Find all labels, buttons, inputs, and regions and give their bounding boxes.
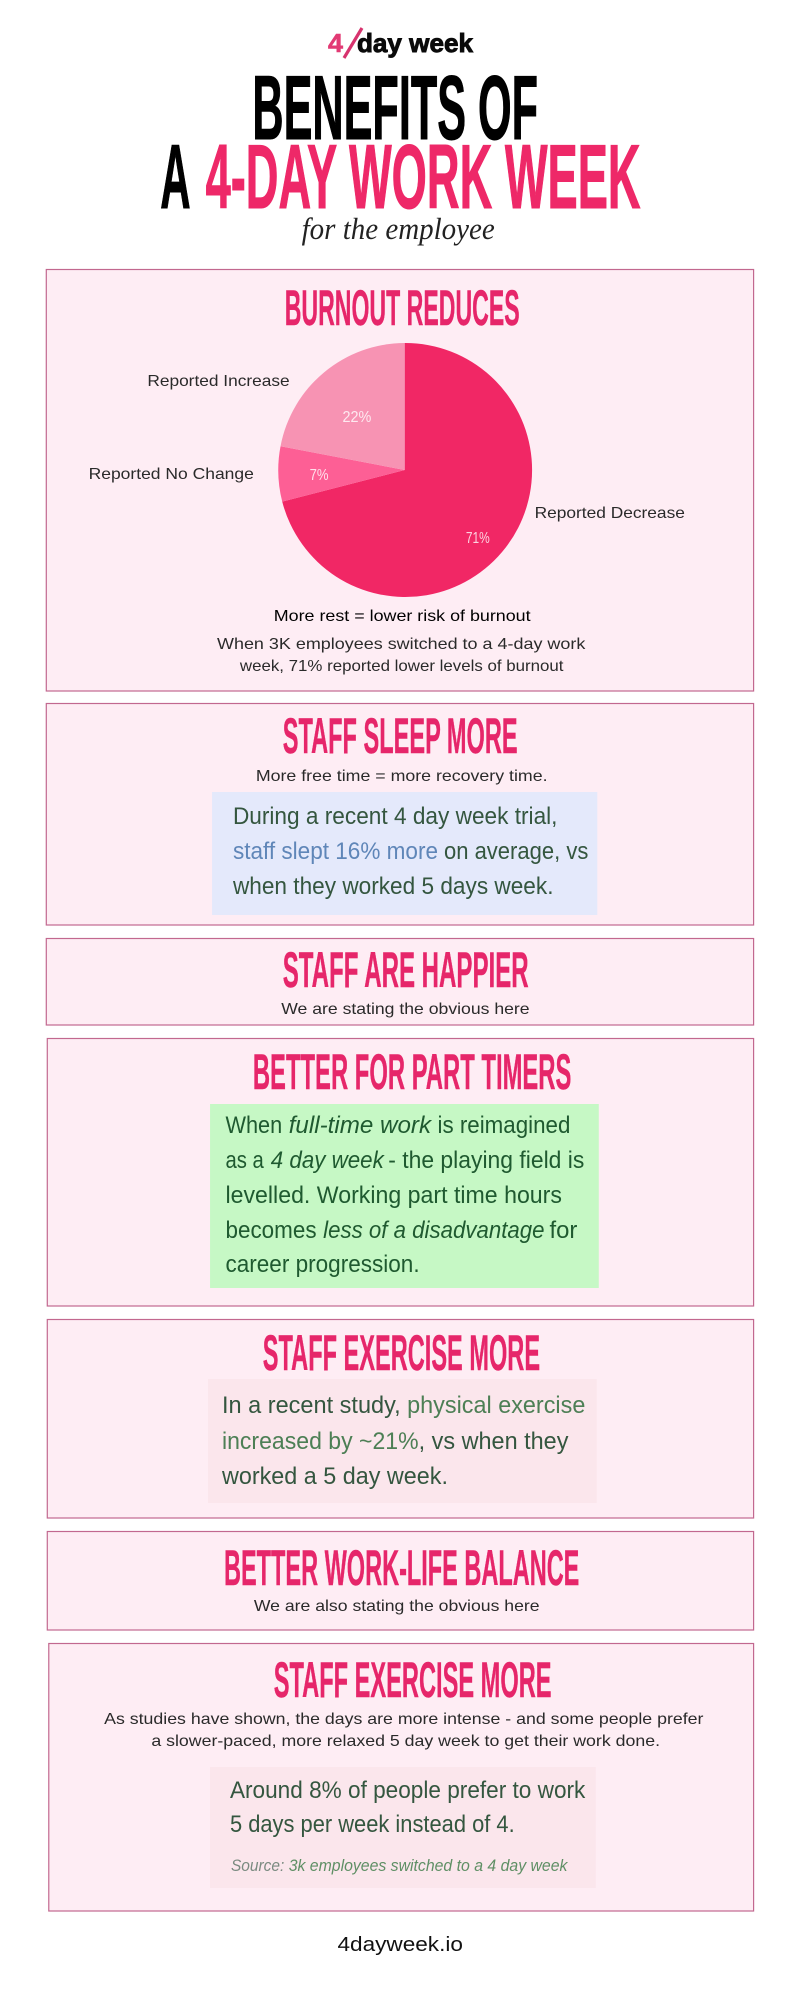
callout: sleep statistic: staff slept 16% more — [233, 838, 438, 865]
title: A — [160, 127, 191, 228]
callout: preference statistic: Source: — [231, 1856, 285, 1875]
footer: website: 4dayweek.io — [337, 1934, 463, 1956]
callout: sleep statistic — [212, 792, 597, 915]
callout: part-time career: career progression. — [225, 1251, 420, 1278]
text: burnout finding: When 3K employees switched to a 4-day work — [217, 636, 586, 653]
callout: exercise statistic — [208, 1379, 597, 1503]
text: intensity explanation: a slower-paced, more relaxed 5 day week to get their work done. — [151, 1733, 660, 1750]
callout: exercise statistic: physical exercise — [407, 1392, 585, 1419]
panel: staff are happier: STAFF ARE HAPPIER — [283, 942, 529, 998]
pie chart: burnout change — [89, 343, 685, 597]
pie chart: burnout change: Reported No Change — [89, 466, 254, 483]
text: also stating the obvious: We are also stating the obvious here — [254, 1598, 540, 1615]
callout: exercise statistic: worked a 5 day week. — [221, 1463, 448, 1490]
callout: preference statistic: Around 8% of people prefer to work — [230, 1777, 585, 1804]
callout: exercise statistic: increased by ~21% — [222, 1428, 419, 1455]
callout: preference statistic — [210, 1767, 596, 1888]
callout: part-time career: - the playing field is — [388, 1147, 584, 1174]
text: burnout finding — [217, 636, 586, 675]
text: burnout finding: week, 71% reported lower levels of burnout — [239, 658, 564, 675]
callout: sleep statistic: when they worked 5 days week. — [232, 873, 553, 900]
title — [160, 58, 641, 228]
panel: better for part timers — [47, 1038, 754, 1306]
callout: preference statistic: 3k employees switched to a 4 day week — [289, 1856, 569, 1875]
pie chart: burnout change: Reported Decrease — [535, 505, 685, 522]
pie chart: burnout change: 7% — [310, 467, 329, 484]
callout: part-time career: becomes — [225, 1217, 317, 1244]
panel: staff are happier — [46, 938, 754, 1025]
subtitle: for the employee: for the employee — [302, 211, 495, 246]
callout: part-time career — [210, 1104, 599, 1288]
callout: sleep statistic: During a recent 4 day week trial, — [233, 803, 557, 830]
panel: burnout reduces — [46, 270, 754, 691]
panel: staff sleep more: STAFF SLEEP MORE — [283, 708, 518, 764]
panel: counterpoint — [49, 1644, 754, 1911]
callout: preference statistic: 5 days per week instead of 4. — [230, 1811, 515, 1838]
panel: staff exercise more — [47, 1320, 754, 1518]
text: recovery time: More free time = more recovery time. — [256, 768, 548, 785]
callout: part-time career: is reimagined — [438, 1112, 570, 1139]
logo: 4/day week: day week — [357, 28, 474, 58]
callout: part-time career: for — [550, 1217, 577, 1244]
callout: part-time career: 4 day week — [271, 1147, 385, 1174]
callout: part-time career: levelled. Working part time hours — [225, 1182, 562, 1209]
panel: staff sleep more — [46, 704, 754, 925]
callout: exercise statistic: In a recent study, — [222, 1392, 401, 1419]
logo: 4/day week: 4 — [328, 28, 344, 58]
callout: sleep statistic: on average, vs — [444, 838, 588, 865]
panel: better work-life balance — [47, 1532, 754, 1630]
panel: burnout reduces: BURNOUT REDUCES — [285, 280, 520, 336]
pie chart: burnout change: 22% — [342, 409, 372, 426]
text: intensity explanation — [104, 1711, 703, 1750]
text: intensity explanation: As studies have shown, the days are more intense - and some people prefer — [104, 1711, 703, 1728]
callout: part-time career: as a — [225, 1147, 264, 1174]
callout: exercise statistic: , vs when they — [419, 1428, 568, 1455]
callout: part-time career: full-time work — [289, 1112, 432, 1139]
callout: part-time career: When — [225, 1112, 282, 1139]
pie chart: burnout change: 71% — [466, 530, 490, 547]
callout: part-time career: less of a disadvantage — [323, 1217, 545, 1244]
pie chart: burnout change: Reported Increase — [147, 373, 290, 390]
text: more rest: More rest = lower risk of burnout — [274, 608, 531, 625]
text: stating the obvious: We are stating the obvious here — [281, 1001, 530, 1018]
